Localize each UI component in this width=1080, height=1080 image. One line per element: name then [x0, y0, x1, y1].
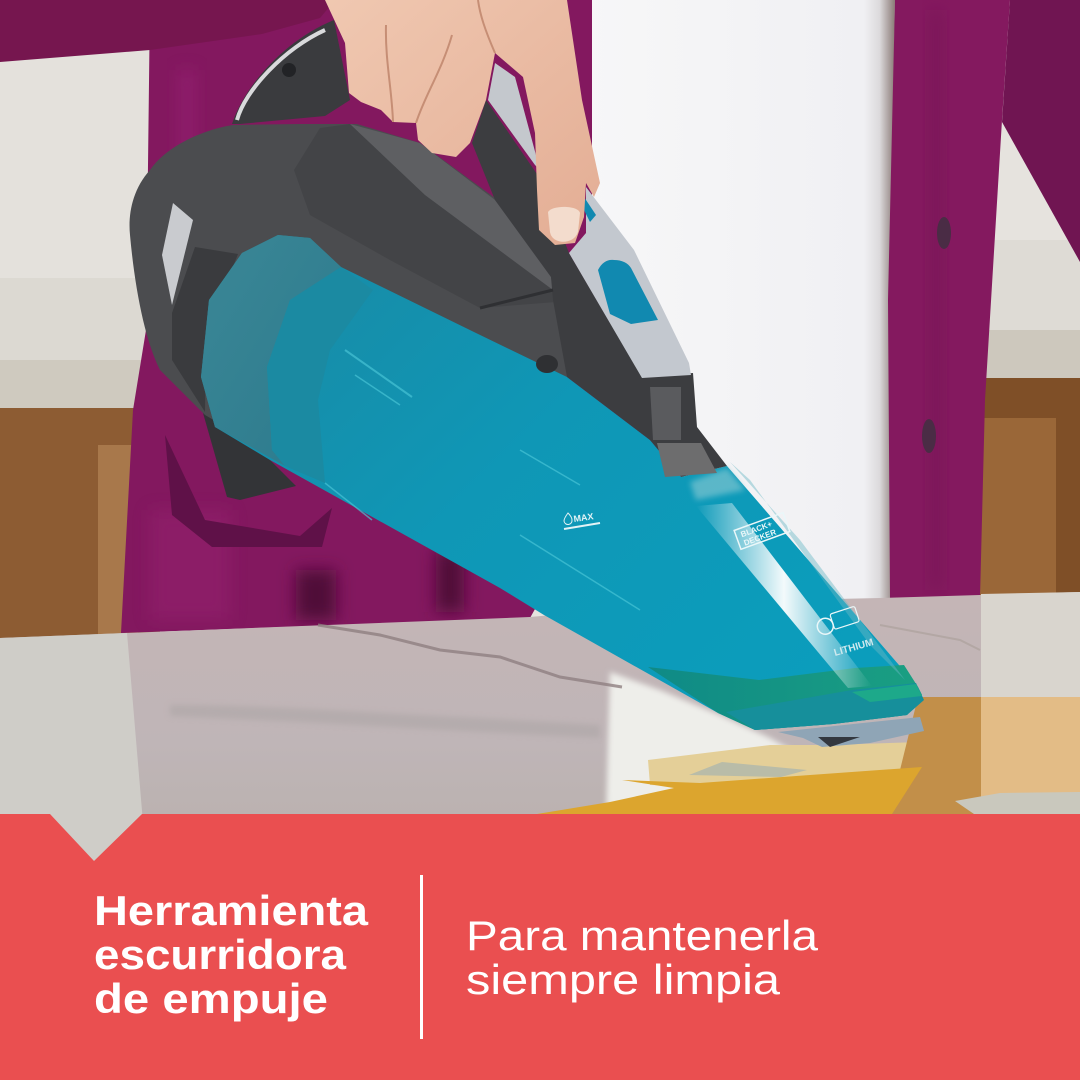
sleeve at top left — [0, 0, 335, 62]
rear highlight — [162, 203, 193, 305]
brand mark — [734, 513, 790, 549]
handle dark strip — [472, 100, 727, 477]
inner rear recess — [172, 247, 238, 412]
right sleeve — [1002, 0, 1080, 262]
silver upper grip — [488, 63, 540, 170]
subheading: siempre limpia — [466, 956, 781, 1003]
subheading — [466, 912, 819, 1003]
heading: de empuje — [94, 975, 328, 1022]
squeegee nozzle — [778, 717, 924, 747]
divider — [420, 875, 423, 1039]
purple cardigan — [0, 0, 1080, 633]
button lower — [922, 419, 936, 453]
water mark — [564, 511, 600, 529]
silver switch panel — [569, 187, 691, 378]
fingernail — [548, 207, 580, 242]
puddle hole — [689, 762, 807, 777]
right puddle hole — [955, 792, 1080, 814]
hand holding handle — [325, 0, 600, 245]
translucent tank — [201, 235, 922, 730]
brown spill — [860, 697, 981, 814]
nozzle lip — [726, 683, 924, 730]
heading — [94, 887, 369, 1022]
tank rear section — [201, 235, 341, 466]
water mark: MAX — [573, 511, 594, 524]
heading: escurridora — [94, 931, 347, 978]
pocket — [165, 435, 332, 547]
red caption panel — [0, 814, 1080, 1080]
right cardigan panel — [888, 0, 1010, 598]
brand mark: BLACK+ — [740, 519, 774, 539]
button upper — [937, 217, 951, 249]
finger creases — [386, 0, 495, 123]
blue slot — [584, 197, 596, 222]
wet badge — [815, 606, 860, 636]
dark cover recess — [294, 124, 556, 308]
photo background: kitchen — [0, 0, 1080, 660]
tank inner streaks — [325, 350, 640, 610]
light cover top — [350, 124, 553, 290]
cardigan body — [121, 0, 700, 633]
lithium label: LITHIUM — [833, 637, 875, 659]
back of hand and fingers — [325, 0, 600, 245]
rear housing — [130, 124, 600, 470]
subheading: Para mantenerla — [466, 912, 819, 959]
white shirt — [585, 0, 895, 600]
heading: Herramienta — [94, 887, 369, 934]
tank mid section — [267, 267, 373, 483]
blue power button — [598, 260, 658, 324]
switch hole — [536, 355, 558, 373]
vacuum stand — [203, 413, 296, 500]
handheld vacuum — [130, 20, 924, 747]
yellow spill — [537, 767, 922, 814]
light reflection streak — [696, 503, 872, 688]
marble counter — [0, 592, 1080, 870]
juice spill — [537, 697, 1080, 814]
cover ridge line — [480, 290, 553, 308]
column detail — [650, 387, 681, 440]
fold shadows — [296, 550, 464, 620]
tan reflected spill — [981, 697, 1080, 814]
vacuum handle arch — [232, 20, 350, 124]
green waterline — [648, 665, 922, 730]
brand mark: DECKER — [743, 527, 778, 548]
pale upper spill — [648, 742, 925, 790]
collar band — [690, 468, 745, 500]
